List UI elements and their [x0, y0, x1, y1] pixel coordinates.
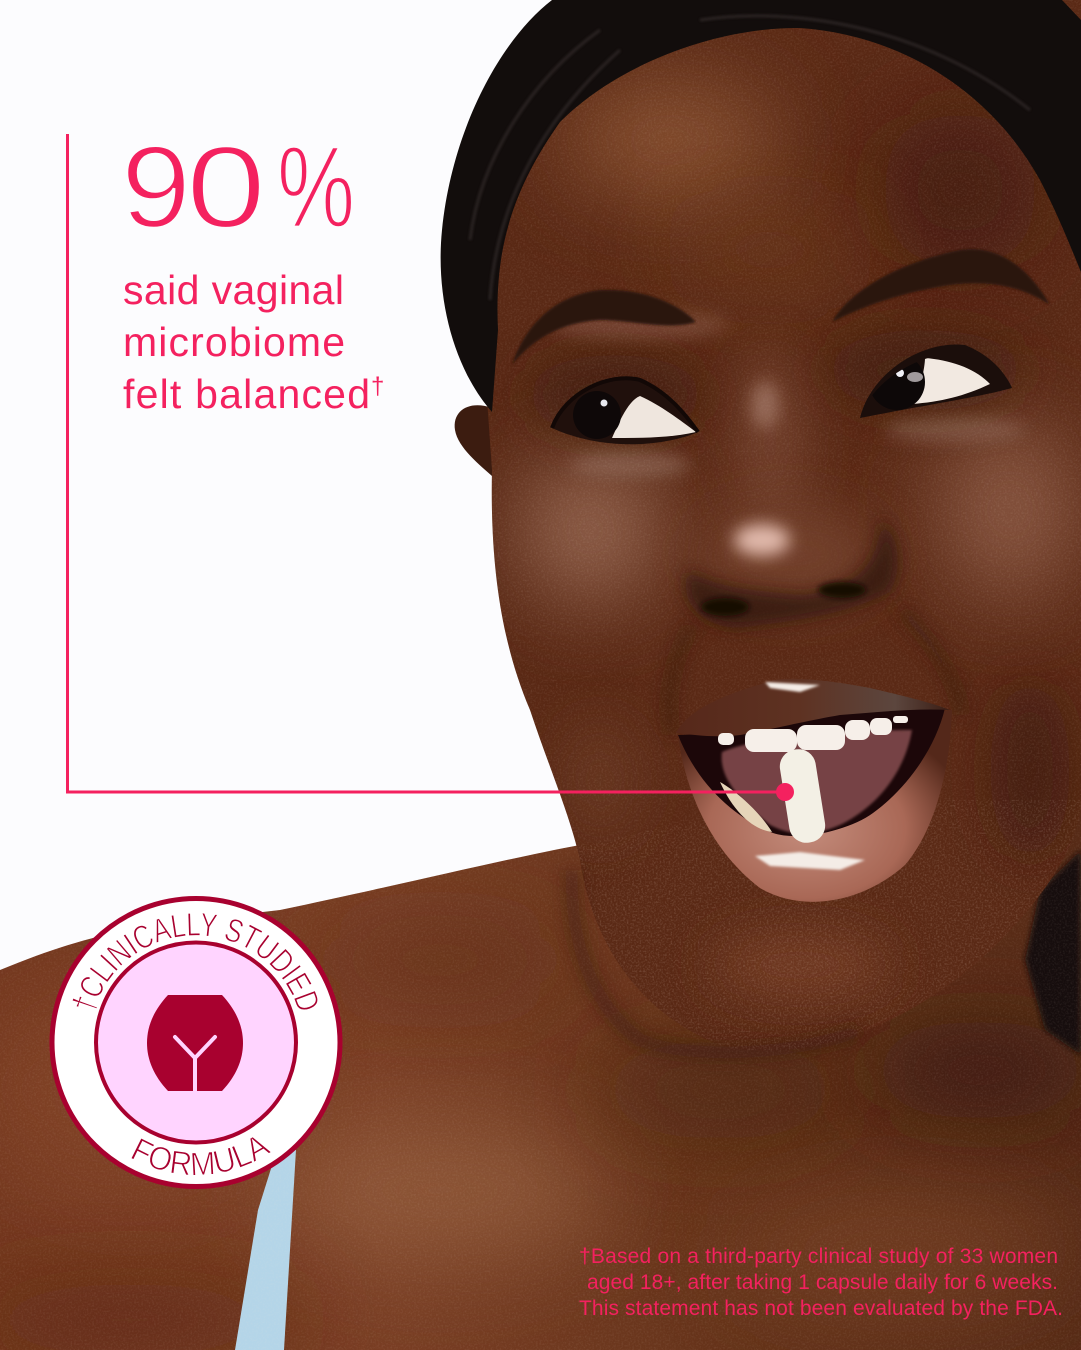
statistic description: said vaginal — [123, 267, 344, 313]
lower lip — [678, 710, 952, 902]
badge: clinically studied formula — [50, 896, 342, 1189]
upper lip — [676, 679, 950, 736]
mouth interior — [678, 708, 945, 836]
statistic description — [123, 267, 384, 417]
left eye — [552, 376, 698, 444]
mouth — [676, 679, 952, 902]
laugh lines — [669, 610, 962, 735]
footnote — [579, 1245, 1063, 1320]
lower teeth — [720, 782, 772, 832]
body skin grain — [0, 800, 1081, 1350]
badge text top: †CLINICALLY STUDIED — [72, 913, 318, 1010]
jaw crease — [572, 870, 860, 1052]
statistic: 90%: % — [277, 122, 355, 252]
shoulder and neck skin — [0, 800, 1081, 1350]
statistic: 90% — [121, 122, 355, 252]
footnote: †Based on a third-party clinical study of 33 women — [579, 1245, 1058, 1268]
statistic description: felt balanced — [123, 371, 370, 417]
tongue — [722, 730, 912, 834]
badge outer ring — [52, 898, 340, 1186]
badge text bottom: FORMULA — [132, 1137, 271, 1175]
statistic: 90%: 0 — [186, 122, 266, 252]
badge inner disc — [96, 942, 296, 1142]
icon: pelvis — [147, 995, 243, 1091]
face — [488, 0, 1081, 1035]
skin grain — [460, 0, 1081, 1100]
eyebrows — [512, 249, 1050, 365]
dark hair behind the neck — [1025, 850, 1081, 1055]
statistic description: microbiome — [123, 319, 345, 365]
footnote: aged 18+, after taking 1 capsule daily for 6 weeks. — [587, 1271, 1058, 1294]
nose — [686, 381, 898, 628]
statistic description: † — [371, 373, 384, 400]
footnote: This statement has not been evaluated by the FDA. — [579, 1297, 1063, 1320]
capsule — [777, 747, 828, 845]
upper teeth — [718, 716, 908, 752]
lip gloss — [755, 682, 865, 870]
ear — [455, 405, 492, 476]
statistic: 90%: 9 — [121, 122, 191, 252]
hair — [441, 0, 1081, 412]
callout line and dot — [68, 134, 794, 801]
bra strap — [235, 1140, 296, 1350]
right eye — [860, 345, 1012, 418]
